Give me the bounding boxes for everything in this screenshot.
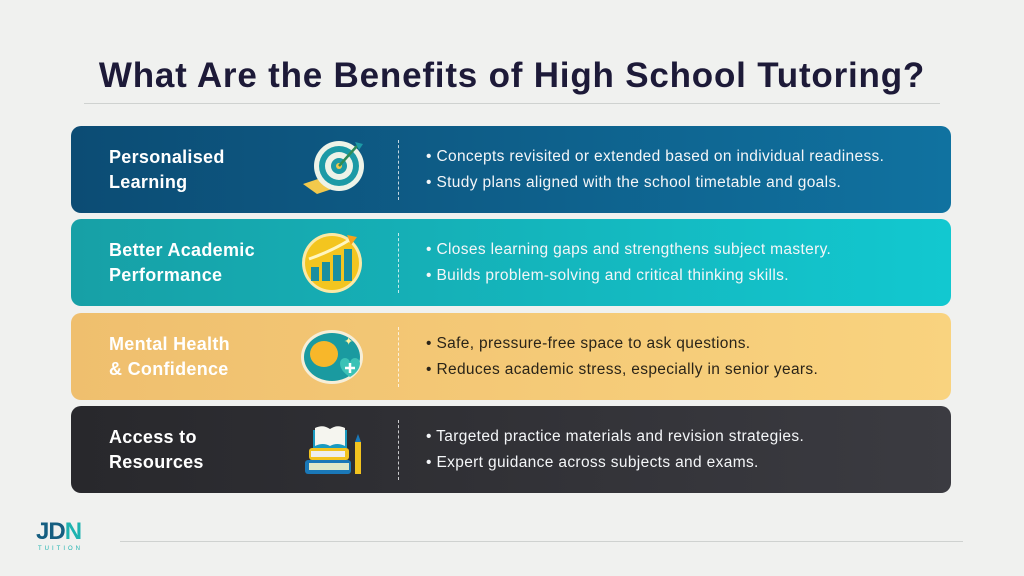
heading — [109, 427, 204, 472]
bullets: Concepts revisited or extended based on individual readiness. — [436, 148, 884, 165]
bullets: Closes learning gaps and strengthens subject mastery. — [436, 241, 831, 258]
bullets — [426, 335, 818, 378]
heading: Resources — [109, 452, 204, 472]
bullets: Safe, pressure-free space to ask questions. — [436, 335, 750, 352]
heading — [109, 147, 225, 192]
heading: Mental Health — [109, 334, 230, 354]
heading: & Confidence — [109, 359, 229, 379]
bullets — [426, 148, 884, 191]
logo: JDN — [36, 518, 81, 545]
bullets: Builds problem-solving and critical thinking skills. — [436, 267, 789, 284]
icon: chart — [302, 233, 362, 293]
bullets: Study plans aligned with the school timetable and goals. — [436, 174, 841, 191]
logo: TUITION — [38, 546, 83, 552]
bullets: Targeted practice materials and revision strategies. — [436, 428, 804, 445]
bullets: Reduces academic stress, especially in senior years. — [436, 361, 818, 378]
panel: personalised learning — [71, 126, 951, 213]
title: What Are the Benefits of High School Tutoring? — [99, 56, 925, 95]
heading: Personalised — [109, 147, 225, 167]
heading: Access to — [109, 427, 197, 447]
icon: brain — [301, 330, 363, 384]
bullets: Expert guidance across subjects and exams. — [436, 454, 759, 471]
icon: brain: ✦ — [344, 336, 353, 348]
bullets — [426, 428, 804, 471]
icon: target — [303, 141, 364, 194]
panel: academic performance — [71, 219, 951, 306]
heading: Learning — [109, 172, 187, 192]
bullets — [426, 241, 831, 284]
heading: Better Academic — [109, 240, 255, 260]
panel: resources — [71, 406, 951, 493]
heading — [109, 334, 230, 379]
heading — [109, 240, 255, 285]
icon: books — [305, 426, 361, 474]
heading: Performance — [109, 265, 222, 285]
panel: mental health — [71, 313, 951, 400]
